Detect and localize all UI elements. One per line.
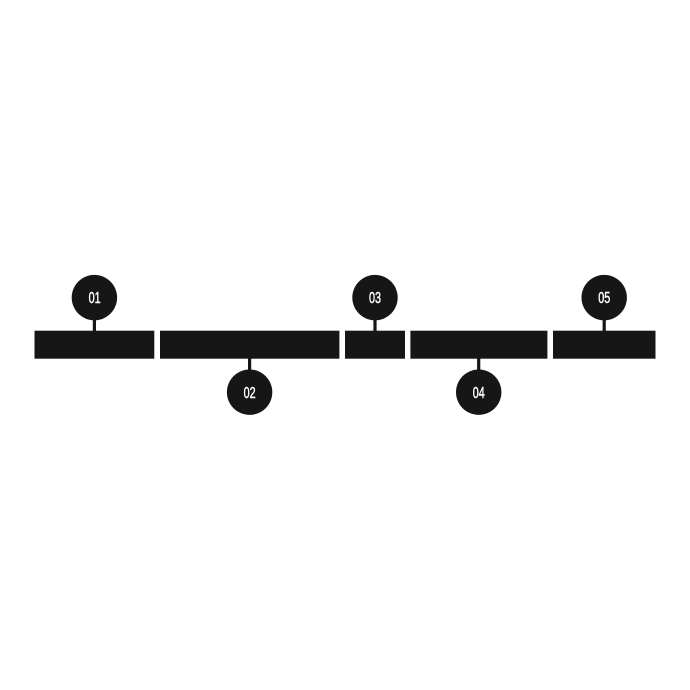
step 05: bar, connector, numbered circle — [553, 275, 656, 359]
step 01: bar, connector, numbered circle: 01 — [89, 290, 101, 307]
step 04: bar, connector, numbered circle — [410, 331, 547, 415]
step 05: bar, connector, numbered circle: 05 — [598, 290, 610, 307]
step 02: bar, connector, numbered circle — [160, 331, 339, 415]
step 03: bar, connector, numbered circle — [345, 275, 405, 359]
step 04: bar, connector, numbered circle: 04 — [473, 385, 485, 402]
step 01: bar, connector, numbered circle — [34, 275, 154, 359]
step 03: bar, connector, numbered circle: 03 — [369, 290, 381, 307]
step 02: bar, connector, numbered circle: 02 — [244, 385, 256, 402]
